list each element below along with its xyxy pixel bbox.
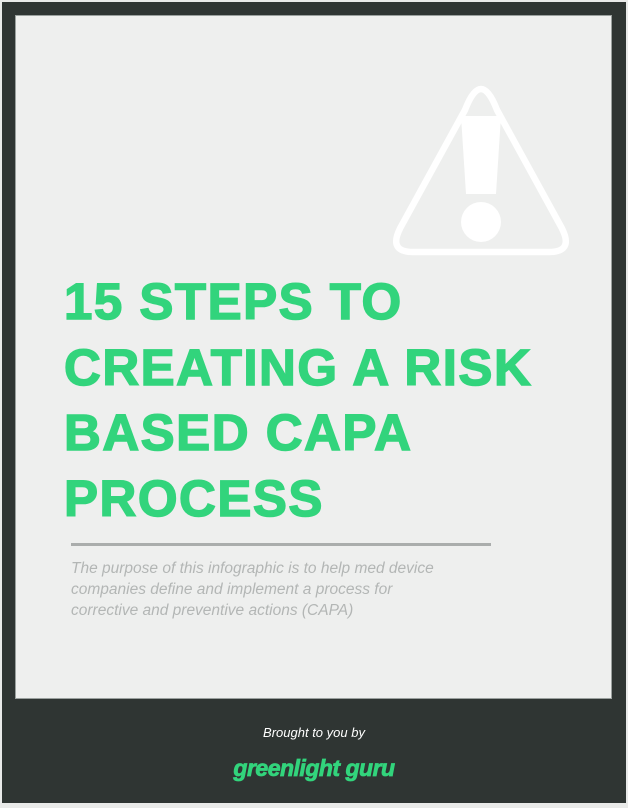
subtitle text: The purpose of this infographic is to help med device companies define and implement a process for corrective and preventive actions (CAPA) bbox=[71, 560, 434, 619]
title: BASED CAPA bbox=[64, 404, 412, 461]
title: 15 STEPS TO bbox=[64, 273, 403, 330]
divider rule bbox=[71, 543, 491, 546]
brought to you by: Brought to you by bbox=[263, 725, 365, 740]
title: CREATING A RISK bbox=[64, 338, 532, 396]
logo: greenlight guru: greenlight guru bbox=[233, 755, 395, 781]
title: PROCESS bbox=[64, 470, 324, 526]
title bbox=[64, 273, 532, 526]
